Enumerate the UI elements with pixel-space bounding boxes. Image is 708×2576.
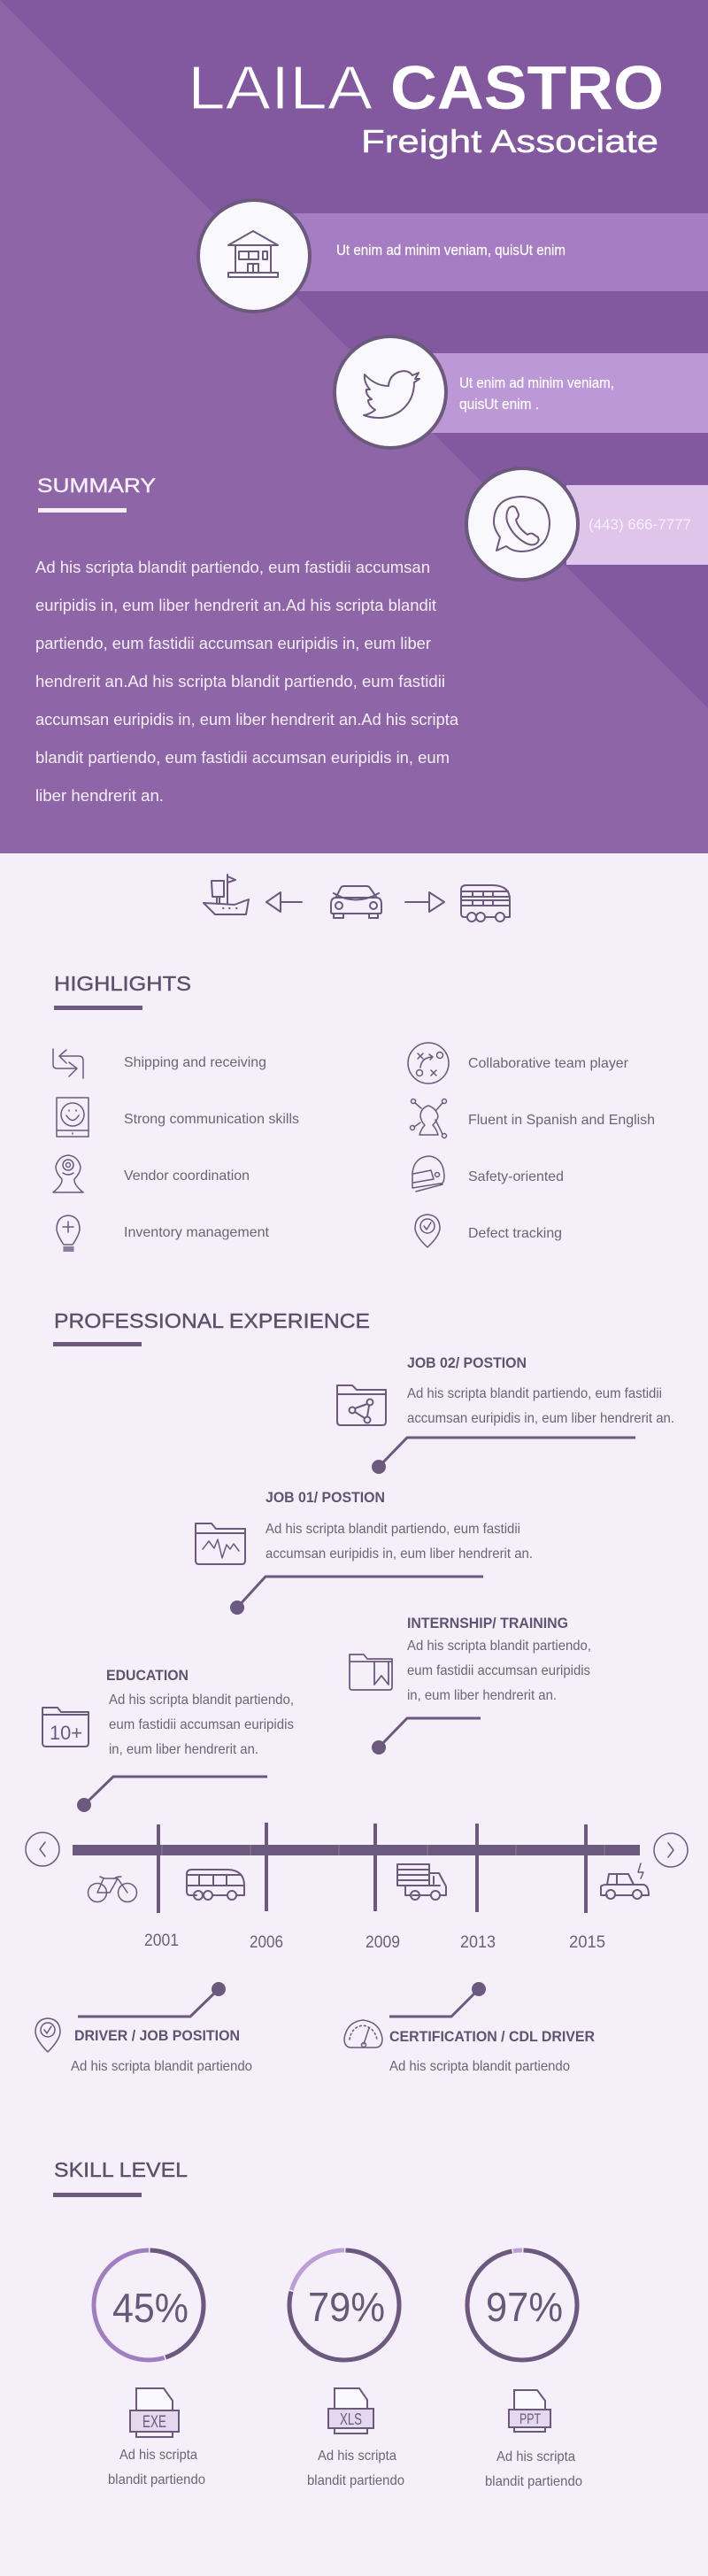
text block: summary paragraph: Ad his scripta blandit partiendo, eum fastidii accumsan	[35, 559, 430, 576]
icon: bicycle	[88, 1877, 136, 1901]
contact row: phone	[466, 468, 708, 580]
icon: location check	[415, 1215, 440, 1247]
connector line	[230, 1577, 483, 1615]
heading: professional experience: PROFESSIONAL EXPERIENCE	[54, 1309, 370, 1332]
timeline	[26, 1823, 688, 1952]
experience: job 01: Ad his scripta blandit partiendo, eum fastidii	[266, 1522, 520, 1537]
connector line	[77, 1777, 267, 1812]
list: highlights right	[408, 1043, 655, 1247]
caption: Ad his scripta	[496, 2449, 575, 2464]
icon: shipping arrows	[53, 1049, 83, 1078]
icon: previous button	[26, 1832, 59, 1866]
text block: summary paragraph: partiendo, eum fastidii accumsan euripidis in, eum liber	[35, 635, 431, 652]
text block: summary paragraph: liber hendrerit an.	[35, 787, 164, 805]
icon: folder share	[337, 1385, 386, 1425]
contact row: twitter: Ut enim ad minim veniam,	[459, 374, 614, 391]
donut chart	[467, 2250, 577, 2360]
experience: internship	[350, 1615, 591, 1755]
experience: internship: INTERNSHIP/ TRAINING	[407, 1615, 568, 1631]
icon: electric car	[601, 1863, 649, 1899]
connector line	[372, 1438, 635, 1474]
caption	[307, 2449, 404, 2488]
heading: summary: SUMMARY	[37, 474, 156, 497]
list: highlights right: Safety-oriented	[468, 1169, 564, 1184]
caption	[108, 2448, 205, 2487]
title: name	[188, 53, 664, 122]
experience: internship: eum fastidii accumsan euripidis	[407, 1663, 590, 1678]
experience: internship: Ad his scripta blandit partiendo,	[407, 1639, 591, 1654]
icon: PPT file: PPT	[519, 2410, 541, 2427]
milestone: driver job position: Ad his scripta blandit partiendo	[71, 2059, 252, 2074]
icon: folder 10+	[42, 1708, 88, 1747]
icon: bus	[187, 1870, 244, 1900]
arrow: left	[266, 892, 302, 912]
timeline years	[144, 1932, 605, 1952]
icon: truck	[397, 1864, 446, 1900]
experience: job 02: JOB 02/ POSTION	[407, 1354, 527, 1371]
contact row: twitter	[335, 336, 708, 448]
heading: skill level	[53, 2158, 188, 2197]
icon: helmet	[412, 1156, 444, 1192]
icon: ship	[204, 875, 249, 914]
icon: PPT file	[509, 2390, 550, 2432]
timeline years: 2015	[569, 1933, 605, 1952]
icon: gauge	[344, 2020, 382, 2048]
contact row: address: Ut enim ad minim veniam, quisUt enim	[336, 242, 566, 258]
experience: education: in, eum liber hendrerit an.	[109, 1742, 258, 1757]
skill: 45%: 45%	[112, 2285, 189, 2331]
title: name: CASTRO	[390, 53, 664, 122]
icon: head with gear	[53, 1155, 83, 1192]
text block: summary paragraph: accumsan euripidis in, eum liber hendrerit an.Ad his scripta	[35, 711, 459, 729]
experience: job 01	[196, 1489, 533, 1615]
text block: summary paragraph: euripidis in, eum liber hendrerit an.Ad his scripta blandit	[35, 597, 436, 614]
list: highlights left: Strong communication skills	[124, 1112, 299, 1127]
timeline years: 2013	[460, 1933, 496, 1952]
contact row: phone: (443) 666-7777	[589, 516, 691, 533]
icon: folder 10+: 10+	[50, 1722, 82, 1744]
text block: summary paragraph: hendrerit an.Ad his scripta blandit partiendo, eum fastidii	[35, 673, 445, 690]
icon: location check	[35, 2018, 60, 2052]
icon: car	[331, 886, 381, 918]
skill: 97%	[467, 2250, 582, 2489]
list: highlights left: Vendor coordination	[124, 1168, 250, 1184]
experience: job 01: JOB 01/ POSTION	[266, 1489, 385, 1506]
panel: header background	[0, 0, 708, 853]
text block: summary paragraph	[35, 559, 459, 805]
icon: next button	[654, 1833, 688, 1867]
milestone: certification: CERTIFICATION / CDL DRIVER	[389, 2028, 595, 2045]
icon: double decker bus	[461, 885, 510, 922]
donut chart	[94, 2250, 204, 2360]
arrow: right	[405, 892, 444, 912]
list: highlights left: Inventory management	[124, 1225, 270, 1240]
skill: 45%	[94, 2250, 205, 2487]
heading: highlights: HIGHLIGHTS	[54, 972, 191, 995]
list: highlights left	[53, 1049, 299, 1251]
experience: education: EDUCATION	[106, 1667, 189, 1684]
heading: skill level: SKILL LEVEL	[54, 2158, 188, 2181]
experience: job 02: accumsan euripidis in, eum liber hendrerit an.	[407, 1411, 674, 1426]
text block: summary paragraph: blandit partiendo, eum fastidii accumsan euripidis in, eum	[35, 749, 450, 767]
list: highlights right: Defect tracking	[468, 1226, 562, 1241]
icon: EXE file: EXE	[142, 2413, 166, 2432]
caption	[485, 2449, 582, 2489]
experience: education: Ad his scripta blandit partiendo,	[109, 1693, 294, 1708]
experience: job 01: accumsan euripidis in, eum liber hendrerit an.	[266, 1546, 533, 1562]
caption: blandit partiendo	[108, 2472, 205, 2487]
list: highlights left: Shipping and receiving	[124, 1055, 266, 1070]
timeline years: 2006	[250, 1933, 283, 1952]
caption: blandit partiendo	[307, 2473, 404, 2488]
icon: strategy circle	[408, 1043, 449, 1084]
experience: education: eum fastidii accumsan euripidis	[109, 1717, 294, 1732]
icon: XLS file: XLS	[340, 2410, 362, 2428]
list: highlights right: Collaborative team player	[468, 1056, 629, 1071]
heading: summary	[37, 474, 156, 513]
timeline ticks	[157, 1823, 588, 1913]
caption: Ad his scripta	[119, 2448, 197, 2463]
heading: professional experience	[53, 1309, 370, 1346]
icon: EXE file	[130, 2388, 179, 2437]
timeline bar	[73, 1845, 640, 1855]
milestone: certification	[344, 1982, 595, 2074]
timeline years: 2001	[144, 1932, 179, 1950]
donut chart	[289, 2250, 399, 2360]
connector line	[372, 1718, 481, 1755]
milestone: driver job position	[35, 1982, 252, 2074]
milestone: driver job position: DRIVER / JOB POSITION	[74, 2027, 240, 2044]
milestone: certification: Ad his scripta blandit partiendo	[389, 2059, 570, 2074]
icon: tablet smile	[57, 1098, 88, 1137]
icon: XLS file	[328, 2388, 373, 2433]
experience: job 02	[337, 1354, 674, 1474]
caption: Ad his scripta	[318, 2449, 396, 2464]
skill: 79%	[289, 2250, 404, 2488]
title: name: LAILA	[188, 53, 373, 122]
timeline years: 2009	[366, 1933, 400, 1952]
experience: internship: in, eum liber hendrerit an.	[407, 1688, 557, 1703]
icon: bulb	[57, 1215, 80, 1251]
subtitle: job title: Freight Associate	[361, 123, 658, 159]
icon: folder bookmark	[350, 1654, 392, 1690]
skill: 97%: 97%	[486, 2284, 563, 2330]
heading: highlights	[54, 972, 191, 1010]
contact row: address	[198, 200, 708, 312]
caption: blandit partiendo	[485, 2474, 582, 2489]
icon: folder pulse	[196, 1523, 245, 1564]
experience: education	[42, 1667, 294, 1812]
experience: job 02: Ad his scripta blandit partiendo, eum fastidii	[407, 1386, 662, 1401]
icon: network person	[411, 1099, 446, 1138]
list: highlights right: Fluent in Spanish and English	[468, 1113, 655, 1128]
contact row: twitter: quisUt enim .	[459, 396, 539, 413]
skill: 79%: 79%	[308, 2284, 385, 2330]
